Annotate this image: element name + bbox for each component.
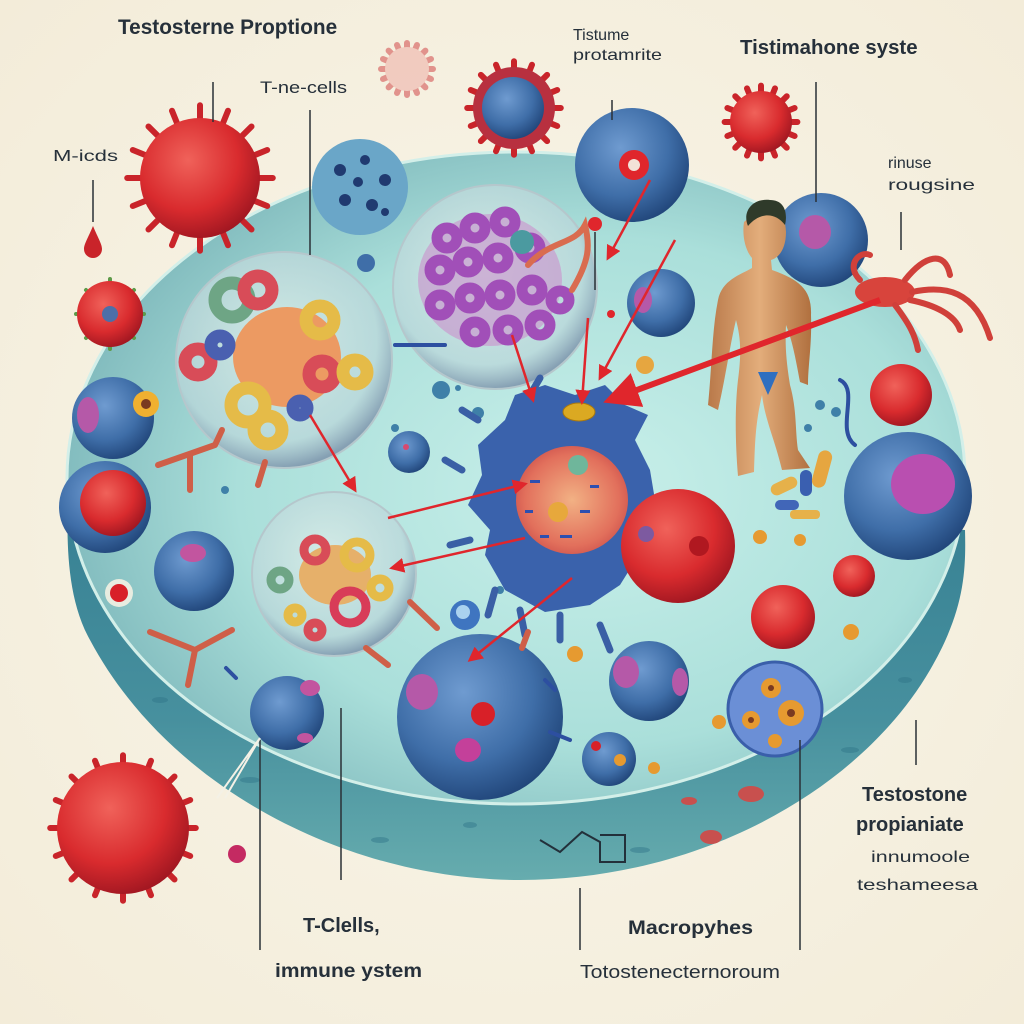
heading: Macropyhes: Macropyhes [628, 917, 753, 939]
virus: top right red [725, 86, 797, 158]
cell: blue lower right center [609, 641, 689, 721]
heading: Tistimahone syste: Tistimahone syste [740, 37, 918, 59]
cell: patterned blue top [312, 139, 408, 235]
heading: T-Clells,: T-Clells, [303, 915, 380, 937]
small particles [228, 217, 859, 863]
cell: small blue center left [388, 431, 430, 473]
panel: tissue disc [67, 152, 965, 880]
leader lines: black [93, 82, 916, 950]
icon: blood drop [84, 226, 102, 258]
bubble: lower immune vesicle [252, 492, 416, 656]
crab: right red [854, 254, 990, 350]
label: M-icds: M-icds [53, 148, 118, 165]
cell: small blue dot [357, 254, 375, 272]
cell: dots [221, 381, 841, 594]
label: Testostone propianiate: Testostone [862, 784, 967, 806]
label: rinuse rougsine: rougsine [888, 177, 975, 194]
cell: big blue bottom [397, 634, 563, 800]
label: Testostone propianiate: propianiate [856, 814, 964, 836]
cell: blue with magenta patch left [154, 531, 234, 611]
virus: bottom left red [50, 755, 196, 901]
cell: blue lower left [250, 676, 324, 750]
virus: left green spiked [76, 279, 144, 349]
cell: red small right [833, 555, 875, 597]
cell: red medium [751, 585, 815, 649]
squiggles: blue molecules [226, 345, 855, 740]
heading: Testosterne Proptione: Testosterne Proptione [118, 16, 337, 39]
label: T-ne-cells: T-ne-cells [260, 78, 347, 97]
cell: blue small center right [627, 269, 695, 337]
virus: faint pink top [381, 43, 433, 95]
cell: left red-blue [59, 461, 151, 553]
cell: small blue at lower middle [450, 600, 480, 630]
bubble: upper immune vesicle [393, 185, 597, 389]
cell: right large blue [844, 432, 972, 560]
label: innumoole teshameesa: innumoole [871, 849, 970, 866]
figure: muscular man [708, 200, 811, 476]
bacterium: orange Y-shapes [150, 430, 528, 685]
bubble: left immune vesicle [176, 252, 392, 468]
heading: immune ystem: immune ystem [275, 960, 422, 982]
bacterium: orange strand top [528, 225, 588, 290]
central cell: cross section [445, 378, 655, 650]
pills: capsules [753, 449, 834, 546]
cell: left blue with eye [72, 377, 159, 459]
cell: blue with red nucleus top [575, 108, 689, 222]
label: Testume protamrite: Tistume [573, 27, 629, 44]
coin: gold receptor [563, 403, 595, 421]
cell: blue with purple patch upper right [774, 193, 868, 287]
cell: macrophage with yellow nuclei [728, 662, 822, 756]
cell: small red-center [105, 579, 133, 607]
cell: small blue bottom [582, 732, 636, 786]
molecule: chemical structure [540, 832, 625, 862]
virus: red and blue top [467, 61, 561, 155]
virus: top left red [127, 105, 273, 251]
arrows: red pathways [310, 180, 880, 660]
pointer: white wedge [217, 738, 260, 798]
label: Testume protamrite: protamrite [573, 47, 662, 64]
label: rinuse rougsine: rinuse [888, 155, 932, 172]
label: innumoole teshameesa: teshameesa [857, 877, 978, 894]
cell: right red [870, 364, 932, 426]
cell: large red front [621, 489, 735, 603]
label: Totostenecternoroum: Totostenecternoroum [580, 962, 780, 982]
